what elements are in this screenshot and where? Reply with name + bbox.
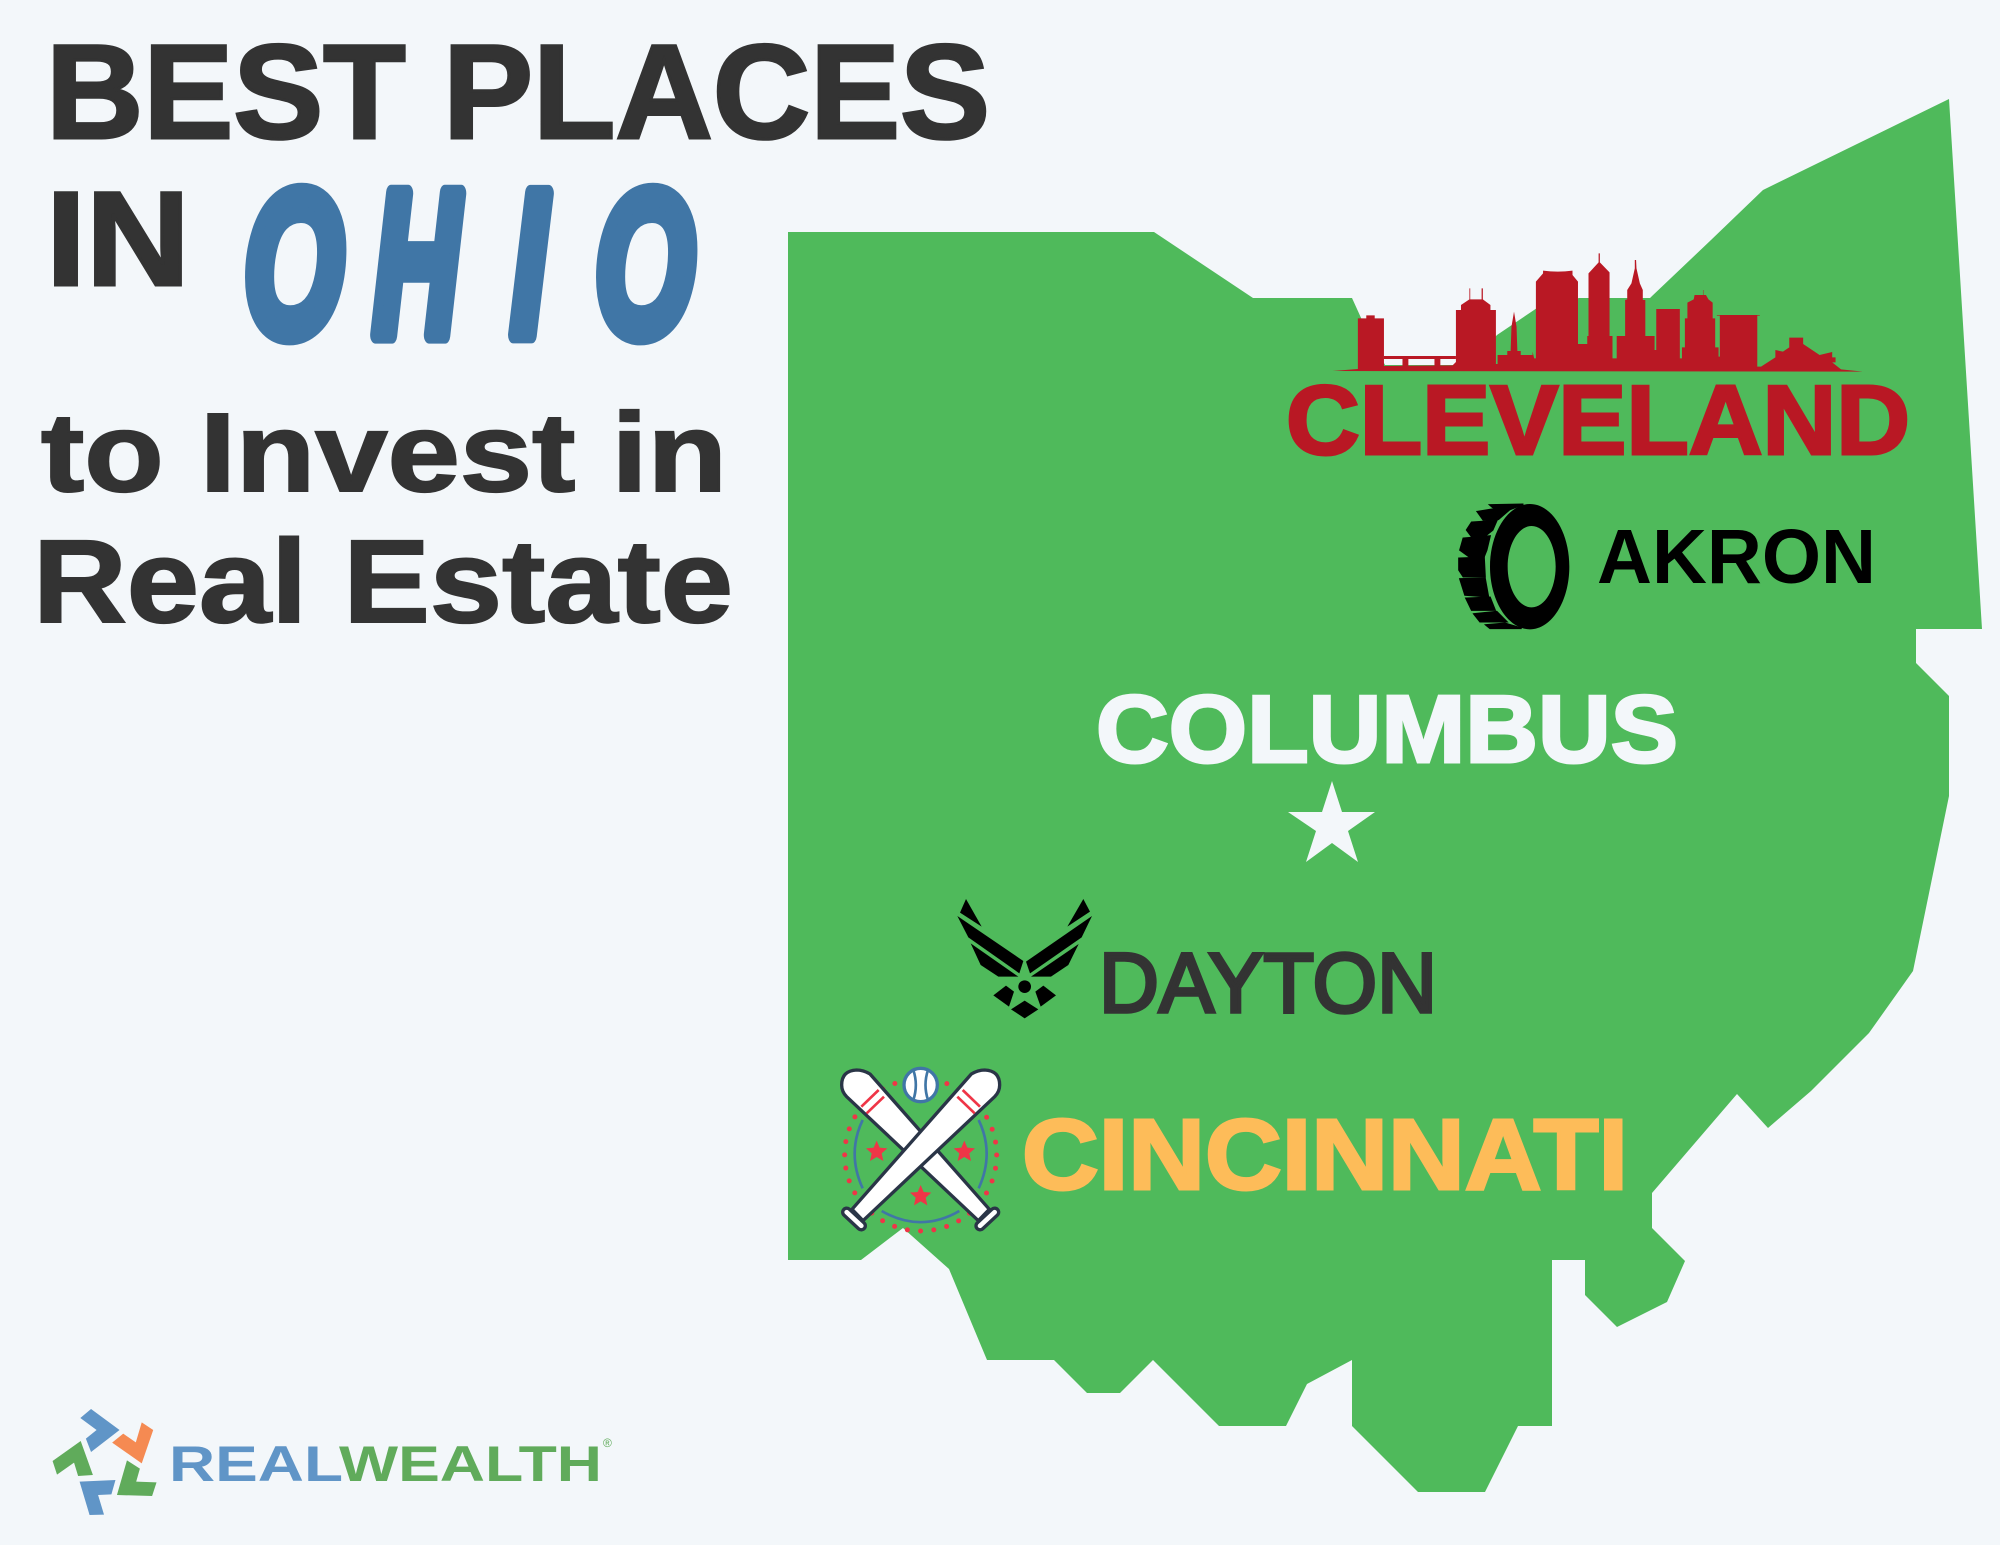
- Cleveland label and skyline: [1286, 253, 1910, 475]
- city name: Cincinnati: CINCINNATI: [1022, 1099, 1628, 1211]
- title: [33, 18, 990, 648]
- city name: Dayton: DAYTON: [1099, 936, 1437, 1030]
- map of Ohio: [788, 99, 1982, 1492]
- Dayton label and air force wings: [957, 899, 1437, 1030]
- icon: capital star: [1288, 781, 1375, 862]
- heading: Best Places: BEST PLACES: [46, 18, 990, 167]
- city name: Cleveland: CLEVELAND: [1286, 365, 1910, 475]
- Columbus label and star: [1096, 676, 1678, 862]
- heading: Ohio: H: [373, 149, 462, 379]
- icon: crossed baseball bats: [841, 1068, 1000, 1231]
- logo mark: [53, 1409, 157, 1515]
- heading: to Invest in: to Invest in: [41, 390, 727, 515]
- RealWealth logo: WEALTH: [339, 1436, 602, 1492]
- RealWealth logo: ®: [603, 1436, 612, 1450]
- city name: Akron: AKRON: [1597, 514, 1876, 600]
- Cincinnati label and crossed bats: [841, 1068, 1628, 1231]
- heading: Ohio: I: [511, 150, 549, 379]
- icon: tire: [1459, 504, 1569, 629]
- RealWealth logo: [53, 1409, 612, 1515]
- heading: Ohio: O: [595, 150, 694, 379]
- icon: air force wings: [957, 899, 1092, 1018]
- Akron label and tire: [1459, 504, 1876, 629]
- icon: Cleveland skyline: [1333, 253, 1863, 372]
- heading: Ohio: [244, 149, 694, 379]
- logo wordmark: REAL: [169, 1436, 343, 1492]
- heading: Ohio: O: [244, 150, 343, 379]
- heading: In: IN: [46, 165, 190, 314]
- city name: Columbus: COLUMBUS: [1096, 676, 1678, 783]
- heading: Real Estate: Real Estate: [33, 516, 733, 648]
